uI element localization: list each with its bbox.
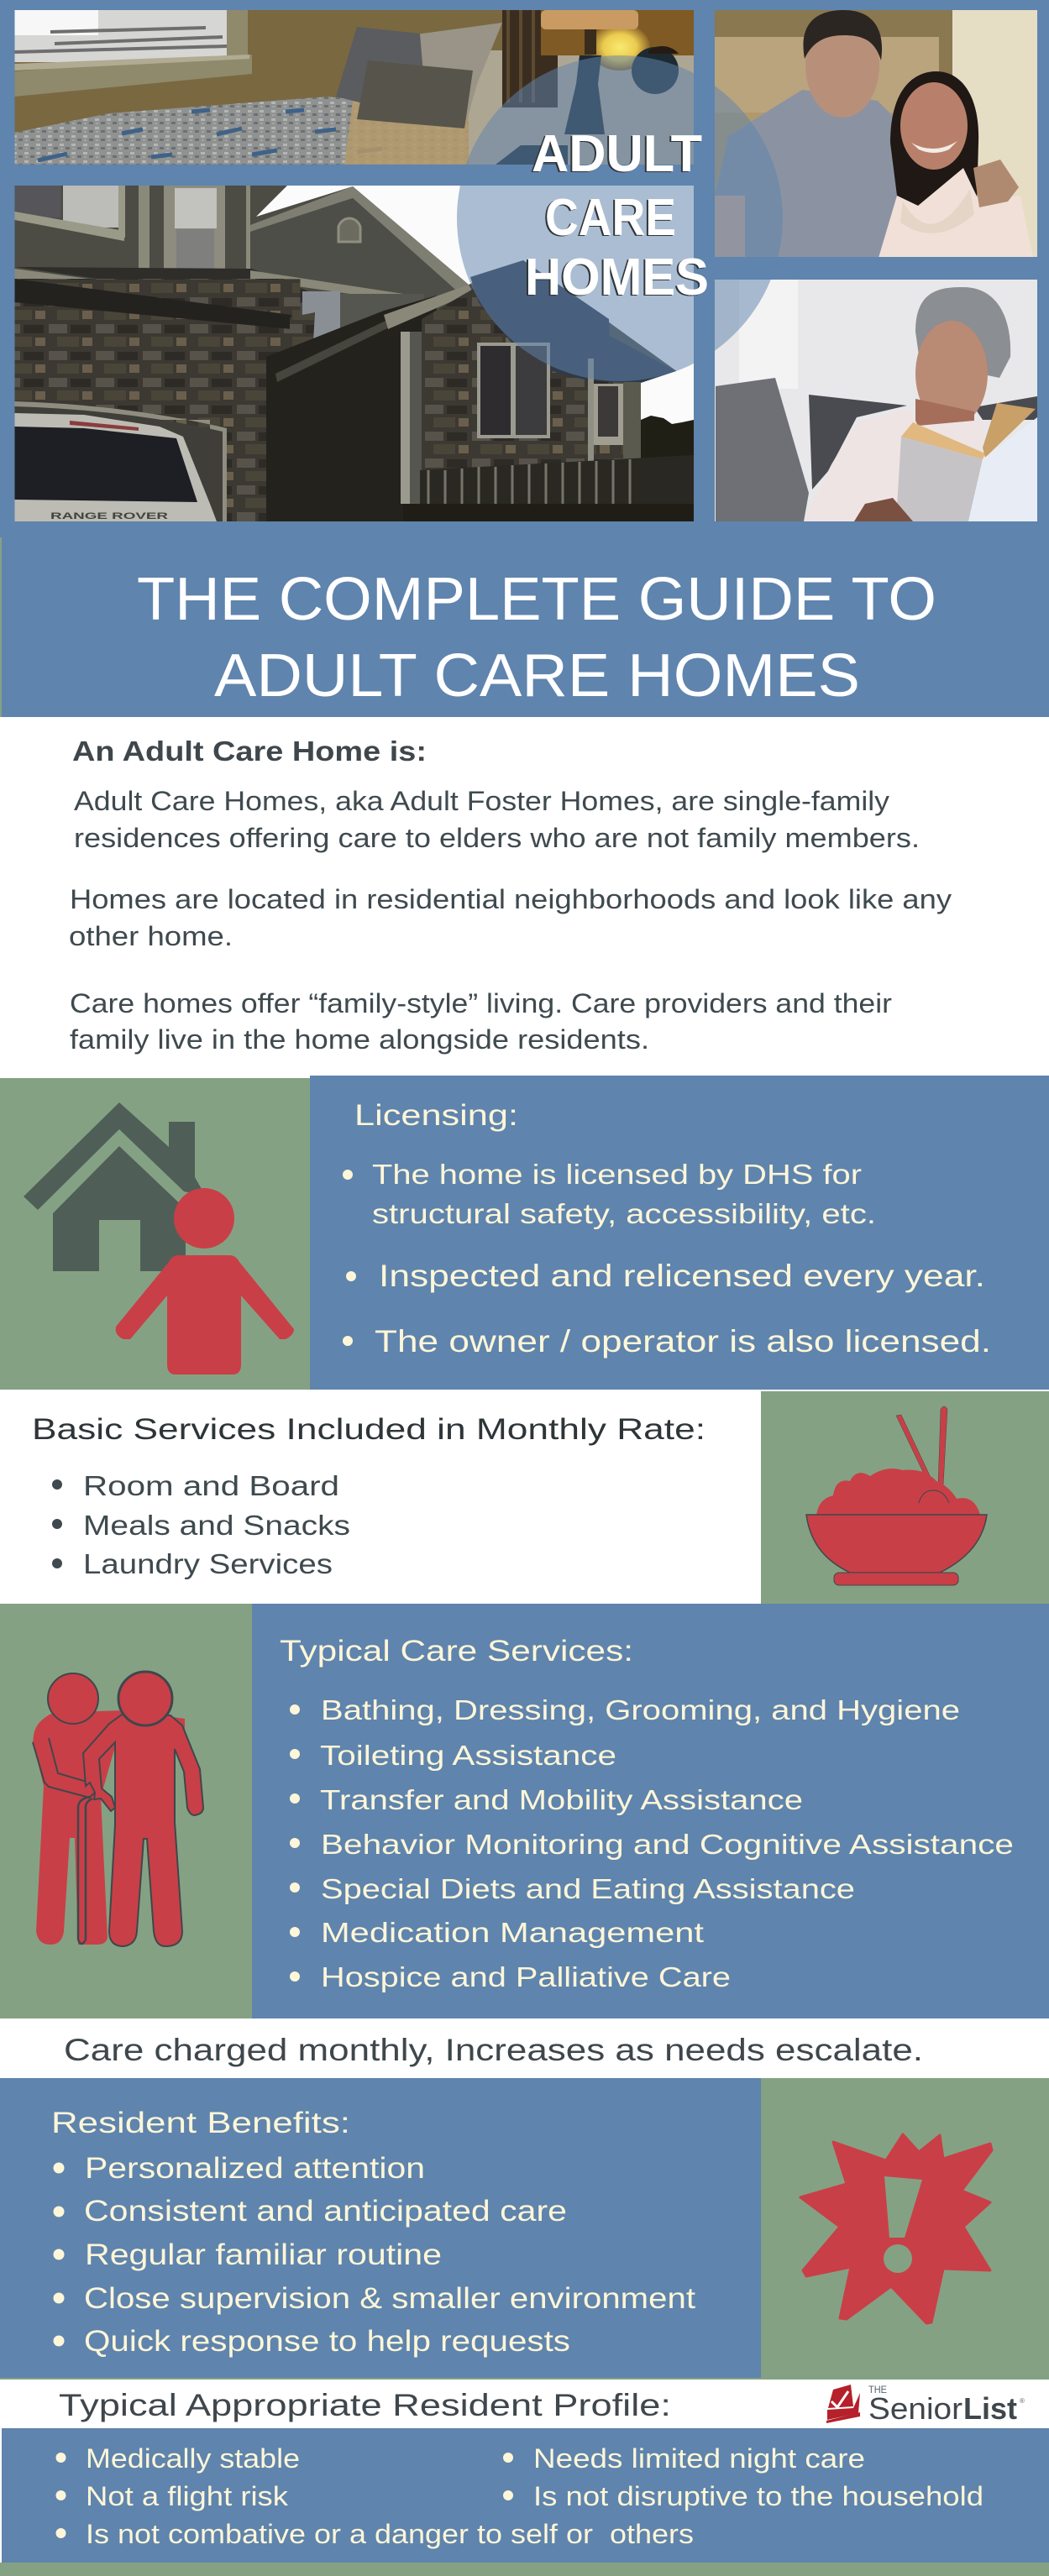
logo title: adult care homes: HOMES	[525, 249, 709, 306]
profile list: Medically stable	[86, 2443, 300, 2474]
photo: house exterior	[15, 186, 694, 521]
benefits list: Personalized attention	[85, 2152, 425, 2185]
basic services list: Laundry Services	[83, 1548, 333, 1579]
panel: resident benefits	[0, 2078, 1049, 2380]
photo: elderly woman reading	[715, 280, 1037, 521]
main title: THE COMPLETE GUIDE TO	[137, 566, 936, 633]
icon: elderly couple with cane	[33, 1672, 203, 1946]
profile list: Is not combative or a danger to self or others	[86, 2519, 694, 2549]
paragraph: location: other home.	[69, 921, 233, 951]
basic services list: Meals and Snacks	[83, 1510, 350, 1541]
bottom green strip	[0, 2563, 1049, 2576]
care services list: Special Diets and Eating Assistance	[321, 1873, 855, 1904]
care services list: Hospice and Palliative Care	[321, 1961, 731, 1992]
logo: the senior list: THE	[868, 2384, 887, 2395]
logo: the senior list: List	[963, 2391, 1017, 2426]
icon: exclamation starburst	[800, 2134, 992, 2323]
translucent circle overlay	[457, 55, 783, 381]
basic services heading: Basic Services Included in Monthly Rate:	[32, 1413, 705, 1446]
main title: ADULT CARE HOMES	[214, 642, 860, 709]
logo title: adult care homes	[525, 125, 709, 306]
paragraph: what it is: Adult Care Homes, aka Adult Foster Homes, are single-family	[74, 786, 889, 816]
basic services list: Room and Board	[83, 1470, 339, 1501]
care services list: Toileting Assistance	[320, 1740, 616, 1771]
logo title: adult care homes: ADULT	[532, 125, 702, 183]
care services list	[290, 1694, 1014, 1992]
care services list: Bathing, Dressing, Grooming, and Hygiene	[321, 1694, 960, 1725]
licensing bullet list: The owner / operator is also licensed.	[375, 1324, 991, 1359]
photo: couple	[715, 10, 1037, 258]
panel: typical care services	[0, 1604, 1049, 2018]
profile list	[55, 2443, 983, 2549]
photo: bedroom	[14, 10, 694, 165]
licensing bullet list	[343, 1159, 991, 1359]
definition heading: An Adult Care Home is:	[72, 736, 427, 767]
care services list: Transfer and Mobility Assistance	[320, 1784, 803, 1815]
paragraph: family-style living: Care homes offer “family-style” living. Care providers and their	[70, 988, 892, 1018]
logo: the senior list: Senior	[868, 2391, 962, 2426]
paragraph: family-style living: family live in the home alongside residents.	[70, 1024, 649, 1055]
care charge note: Care charged monthly, Increases as needs escalate.	[64, 2033, 923, 2067]
benefits list: Close supervision & smaller environment	[84, 2282, 695, 2315]
logo title: adult care homes: CARE	[545, 189, 676, 247]
care services list: Medication Management	[321, 1917, 704, 1948]
panel: licensing	[0, 1076, 1049, 1390]
panel: basic services	[0, 1390, 1049, 1604]
licensing bullet list: The home is licensed by DHS for	[372, 1159, 862, 1190]
paragraph: location	[69, 884, 952, 951]
care services heading: Typical Care Services:	[280, 1635, 633, 1668]
title band	[0, 537, 1049, 717]
paragraph: what it is: residences offering care to elders who are not family members.	[74, 823, 920, 853]
logo: the senior list	[826, 2384, 1025, 2426]
profile list: Needs limited night care	[533, 2443, 865, 2474]
licensing heading: Licensing:	[354, 1099, 518, 1132]
photo: house exterior: RANGE ROVER	[50, 511, 168, 521]
licensing bullet list: structural safety, accessibility, etc.	[372, 1198, 876, 1229]
benefits list: Consistent and anticipated care	[84, 2195, 567, 2228]
basic services list	[52, 1470, 350, 1579]
logo: the senior list: ®	[1020, 2397, 1025, 2405]
resident profile heading: Typical Appropriate Resident Profile:	[59, 2388, 671, 2422]
icon: house and person	[24, 1102, 294, 1374]
panel: resident profile	[2, 2428, 1049, 2563]
care services list: Behavior Monitoring and Cognitive Assistance	[321, 1829, 1014, 1860]
paragraph: location: Homes are located in residential neighborhoods and look like any	[70, 884, 952, 914]
profile list: Is not disruptive to the household	[533, 2481, 983, 2511]
benefits list	[54, 2152, 695, 2358]
paragraph: family-style living	[70, 988, 892, 1055]
benefits heading: Resident Benefits:	[51, 2107, 350, 2139]
hero panel with photo collage	[0, 0, 1049, 537]
benefits list: Quick response to help requests	[84, 2325, 570, 2358]
main title	[137, 566, 936, 709]
benefits list: Regular familiar routine	[85, 2238, 442, 2271]
profile list: Not a flight risk	[86, 2481, 289, 2511]
definition text block	[69, 736, 952, 1055]
licensing bullet list: Inspected and relicensed every year.	[379, 1259, 985, 1293]
paragraph: what it is	[74, 786, 920, 853]
icon: rice bowl with chopsticks	[806, 1406, 987, 1585]
